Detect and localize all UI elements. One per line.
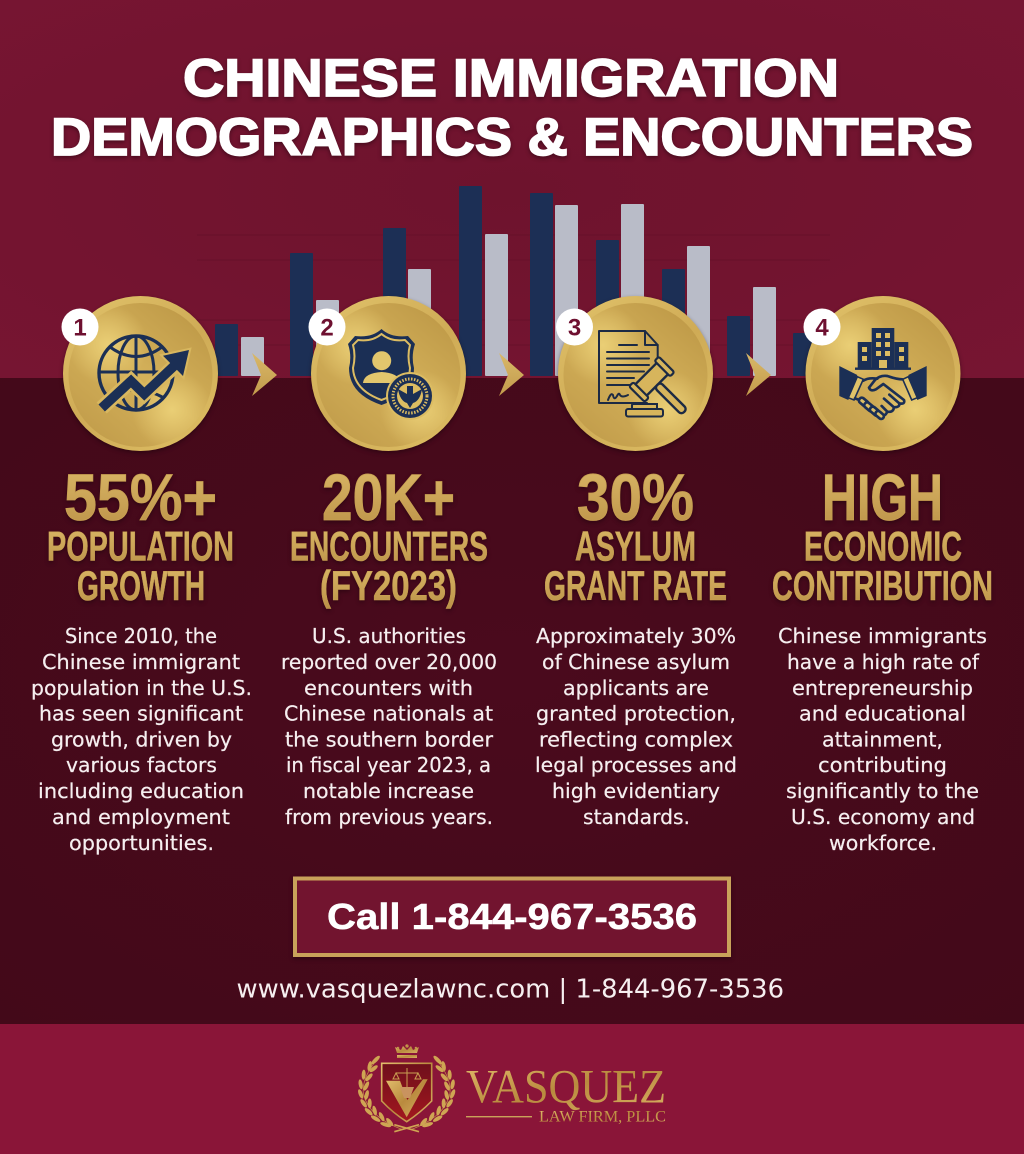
description: U.S. authorities: [312, 624, 466, 648]
panel: encounters: [281, 296, 497, 829]
panel: economic contribution: [772, 296, 993, 855]
badge 1: [62, 308, 98, 346]
shield with V: [382, 1063, 432, 1122]
subheading encounters FY2023: [290, 522, 488, 609]
description: workforce.: [829, 831, 937, 855]
description: high evidentiary: [552, 779, 720, 803]
description: the southern border: [285, 728, 494, 752]
panel: population growth: [31, 296, 252, 855]
description: U.S. economy and: [791, 805, 975, 829]
description: reflecting complex: [539, 728, 733, 752]
subheading asylum grant rate: [544, 522, 727, 609]
stat 30%: 30%: [577, 460, 694, 534]
icon: document and gavel: [599, 331, 699, 427]
gold coin 4: [806, 296, 960, 451]
badge 1: 1: [73, 314, 87, 342]
description: including education: [38, 779, 244, 803]
panel: asylum grant rate: [535, 296, 737, 829]
icon: shield with person and seal: [348, 329, 434, 420]
description: of Chinese asylum: [542, 650, 730, 674]
description: various factors: [66, 753, 217, 777]
upper background: [0, 0, 1024, 378]
crown: [395, 1044, 419, 1058]
subheading population growth: [47, 522, 234, 609]
description: Chinese immigrants: [778, 624, 987, 648]
badge 3: 3: [568, 314, 581, 342]
stat HIGH: HIGH: [822, 460, 943, 534]
background bar chart: [215, 186, 816, 376]
subheading population growth: GROWTH: [77, 562, 205, 609]
divider line and tagline: LAW FIRM, PLLC: [539, 1109, 666, 1126]
description: from previous years.: [285, 805, 493, 829]
stat 20K+: 20K+: [322, 460, 455, 534]
footer band: [0, 1024, 1024, 1154]
subheading asylum grant rate: ASYLUM: [575, 522, 696, 570]
wordmark: VASQUEZ: [466, 1061, 666, 1114]
call button: [295, 878, 729, 955]
laurel wreath: [357, 1055, 456, 1132]
description: Since 2010, the: [65, 624, 217, 648]
subheading population growth: POPULATION: [47, 522, 234, 570]
description: [535, 624, 737, 829]
description: legal processes and: [535, 753, 737, 777]
description: reported over 20,000: [281, 650, 497, 674]
subheading economic contribution: [772, 522, 993, 609]
description: attainment,: [822, 728, 943, 752]
gold coin 1: [63, 296, 218, 451]
description: in fiscal year 2023, a: [286, 753, 491, 777]
description: and educational: [799, 702, 966, 726]
subheading encounters FY2023: (FY2023): [320, 562, 457, 609]
description: population in the U.S.: [31, 676, 252, 700]
icon: globe with rising arrow: [99, 336, 189, 410]
description: growth, driven by: [51, 728, 232, 752]
description: and employment: [52, 805, 230, 829]
description: opportunities.: [69, 831, 214, 855]
description: entrepreneurship: [792, 676, 973, 700]
icon: buildings and handshake: [839, 328, 927, 420]
gold coin 3: [558, 296, 713, 451]
call button: Call 1-844-967-3536: [327, 896, 697, 937]
title: DEMOGRAPHICS & ENCOUNTERS: [51, 108, 973, 167]
gold coin 2: [311, 296, 466, 451]
description: standards.: [583, 805, 690, 829]
arrow 1: [252, 353, 277, 396]
arrow 3: [746, 353, 771, 396]
title: CHINESE IMMIGRATION: [183, 49, 839, 108]
title: [51, 49, 973, 167]
badge 3: [556, 308, 593, 346]
description: applicants are: [563, 676, 709, 700]
description: contributing: [818, 753, 947, 777]
badge 4: [804, 308, 840, 346]
description: Chinese immigrant: [42, 650, 240, 674]
description: has seen significant: [39, 702, 243, 726]
description: granted protection,: [536, 702, 736, 726]
website and phone line: www.vasquezlawnc.com | 1-844-967-3536: [236, 974, 784, 1004]
description: notable increase: [303, 779, 474, 803]
description: significantly to the: [786, 779, 979, 803]
badge 4: 4: [815, 314, 829, 342]
description: [31, 624, 252, 855]
description: [281, 624, 497, 829]
badge 2: [308, 308, 346, 346]
arrow 2: [499, 353, 524, 396]
description: [778, 624, 987, 855]
logo: Vasquez Law Firm: [357, 1044, 666, 1132]
description: have a high rate of: [787, 650, 980, 674]
lower background: [0, 378, 1024, 1024]
description: Approximately 30%: [536, 624, 736, 648]
description: Chinese nationals at: [284, 702, 493, 726]
subheading encounters FY2023: ENCOUNTERS: [290, 522, 488, 570]
badge 2: 2: [320, 314, 334, 342]
stat 55%+: 55%+: [64, 460, 217, 534]
description: encounters with: [304, 676, 473, 700]
subheading asylum grant rate: GRANT RATE: [544, 562, 727, 609]
